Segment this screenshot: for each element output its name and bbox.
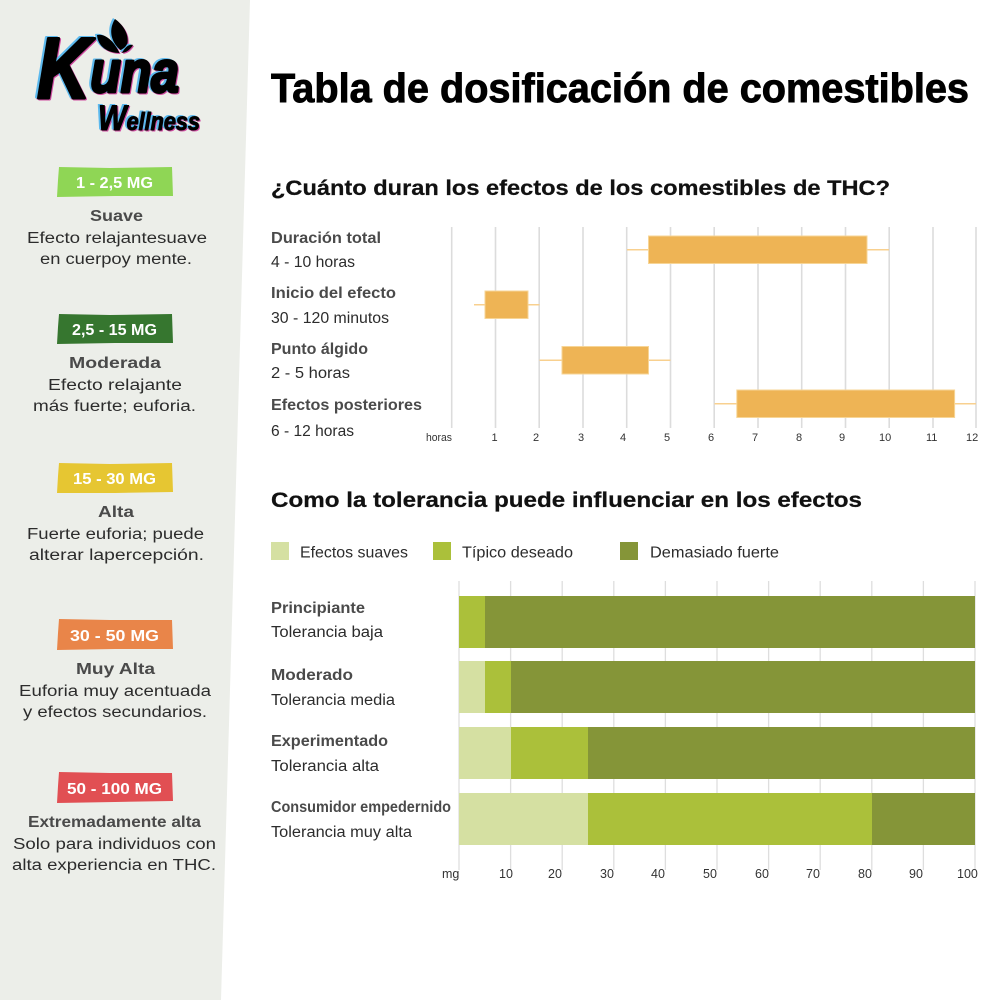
- text: description: [27, 230, 207, 268]
- chart labels: tolerance: Tolerancia muy alta: [271, 824, 412, 841]
- axis labels: mg: 70: [806, 867, 820, 881]
- chart labels: tolerance: Experimentado: [271, 733, 388, 750]
- pill: 15 - 30 MG: [57, 463, 173, 493]
- pill: 2,5 - 15 MG: 2,5 - 15 MG: [72, 322, 157, 339]
- logo word: Wellness: Wellness: [98, 99, 200, 138]
- text: description: Euforia muy acentuada: [19, 683, 211, 700]
- legend: [271, 542, 779, 562]
- axis labels: hours: 11: [926, 432, 937, 444]
- heading: Extremadamente alta: Extremadamente alta: [28, 814, 201, 831]
- box: Efectos posteriores: [714, 390, 976, 418]
- heading: duration chart: ¿Cuánto duran los efectos de los comestibles de THC?: [271, 177, 890, 200]
- axis labels: hours: 4: [620, 432, 626, 444]
- axis labels: hours: 10: [879, 432, 891, 444]
- panel: sidebar background: [0, 0, 250, 1000]
- pill: 15 - 30 MG: 15 - 30 MG: [73, 471, 156, 488]
- axis labels: mg: 10: [499, 867, 513, 881]
- axis labels: mg: 40: [651, 867, 665, 881]
- chart labels: duration: 30 - 120 minutos: [271, 310, 389, 327]
- bar: Consumidor empedernido: [459, 793, 975, 845]
- icon: leaves: [97, 19, 133, 53]
- text: description: [12, 836, 216, 874]
- axis labels: mg: 20: [548, 867, 562, 881]
- title: Tabla de dosificación de comestibles: [271, 65, 969, 111]
- dose: 1 - 2,5 MG: [27, 167, 207, 268]
- chart labels: duration: 2 - 5 horas: [271, 365, 350, 382]
- axis labels: hours: horas: [426, 432, 452, 444]
- heading: tolerance chart: Como la tolerancia puede influenciar en los efectos: [271, 489, 862, 512]
- chart labels: tolerance: [271, 600, 451, 841]
- box: Punto álgido: [540, 346, 670, 374]
- axis labels: hours: 7: [752, 432, 758, 444]
- pill: 30 - 50 MG: [57, 619, 173, 650]
- chart labels: tolerance: Tolerancia media: [271, 692, 395, 709]
- chart labels: duration: [271, 230, 422, 440]
- axis labels: hours: 2: [533, 432, 539, 444]
- text: description: y efectos secundarios.: [23, 704, 207, 721]
- text: description: Solo para individuos con: [13, 836, 216, 853]
- heading: Moderada: Moderada: [69, 355, 161, 372]
- pill: 30 - 50 MG: 30 - 50 MG: [70, 628, 159, 645]
- chart labels: tolerance: Consumidor empedernido: [271, 799, 451, 816]
- axis labels: hours: 5: [664, 432, 670, 444]
- axis labels: hours: 9: [839, 432, 845, 444]
- axis labels: hours: 6: [708, 432, 714, 444]
- text: description: Efecto relajantesuave: [27, 230, 207, 247]
- chart labels: tolerance: Principiante: [271, 600, 365, 617]
- heading: Muy Alta: Muy Alta: [76, 661, 155, 678]
- chart: tolerance stacked bars: [442, 581, 978, 881]
- dose: 15 - 30 MG: [27, 463, 204, 564]
- text: description: [19, 683, 211, 721]
- pill: 1 - 2,5 MG: [57, 167, 173, 197]
- legend: Demasiado fuerte: [650, 544, 779, 562]
- axis labels: mg: mg: [442, 867, 459, 881]
- box: Duración total: [627, 236, 889, 264]
- axis labels: mg: [442, 867, 978, 881]
- chart labels: duration: 6 - 12 horas: [271, 423, 354, 440]
- axis labels: mg: 80: [858, 867, 872, 881]
- text: description: [27, 526, 204, 564]
- text: description: alterar lapercepción.: [29, 547, 204, 564]
- axis labels: mg: 50: [703, 867, 717, 881]
- chart labels: duration: Punto álgido: [271, 341, 368, 358]
- chart labels: duration: Efectos posteriores: [271, 397, 422, 414]
- axis labels: mg: 90: [909, 867, 923, 881]
- legend: Típico deseado: [462, 544, 573, 562]
- axis labels: hours: [426, 432, 978, 444]
- legend: Efectos suaves: [300, 544, 408, 562]
- bar: Principiante: [459, 596, 975, 648]
- box: Inicio del efecto: [474, 291, 540, 318]
- chart labels: duration: 4 - 10 horas: [271, 254, 355, 271]
- chart labels: duration: Duración total: [271, 230, 381, 247]
- axis labels: hours: 3: [578, 432, 584, 444]
- bar: Experimentado: [459, 727, 975, 779]
- chart labels: tolerance: Tolerancia baja: [271, 624, 383, 641]
- text: description: [33, 377, 196, 415]
- dose: 50 - 100 MG: [12, 772, 216, 874]
- pill: 2,5 - 15 MG: [57, 314, 173, 344]
- dose: 30 - 50 MG: [19, 619, 211, 721]
- axis labels: hours: 12: [966, 432, 978, 444]
- chart labels: duration: Inicio del efecto: [271, 285, 396, 302]
- axis labels: hours: 1: [492, 432, 498, 444]
- pill: 50 - 100 MG: 50 - 100 MG: [67, 781, 162, 798]
- chart labels: tolerance: Tolerancia alta: [271, 758, 379, 775]
- text: description: más fuerte; euforia.: [33, 398, 196, 415]
- logo: Kuna Wellness: [37, 19, 200, 138]
- axis labels: mg: 100: [957, 867, 978, 881]
- heading: Suave: Suave: [90, 208, 143, 225]
- bar: Moderado: [459, 661, 975, 713]
- pill: 1 - 2,5 MG: 1 - 2,5 MG: [76, 175, 153, 192]
- axis labels: mg: 30: [600, 867, 614, 881]
- axis labels: hours: 8: [796, 432, 802, 444]
- axis labels: mg: 60: [755, 867, 769, 881]
- text: description: en cuerpoy mente.: [40, 251, 192, 268]
- pill: 50 - 100 MG: [57, 772, 173, 803]
- dose: 2,5 - 15 MG: [33, 314, 196, 415]
- logo word: Kuna: una: [90, 40, 179, 105]
- text: description: Fuerte euforia; puede: [27, 526, 204, 543]
- chart labels: tolerance: Moderado: [271, 667, 353, 684]
- chart: duration box plot: [426, 227, 978, 444]
- text: description: Efecto relajante: [48, 377, 182, 394]
- heading: Alta: Alta: [98, 504, 134, 521]
- text: description: alta experiencia en THC.: [12, 857, 216, 874]
- logo word: Kuna: K: [37, 21, 99, 117]
